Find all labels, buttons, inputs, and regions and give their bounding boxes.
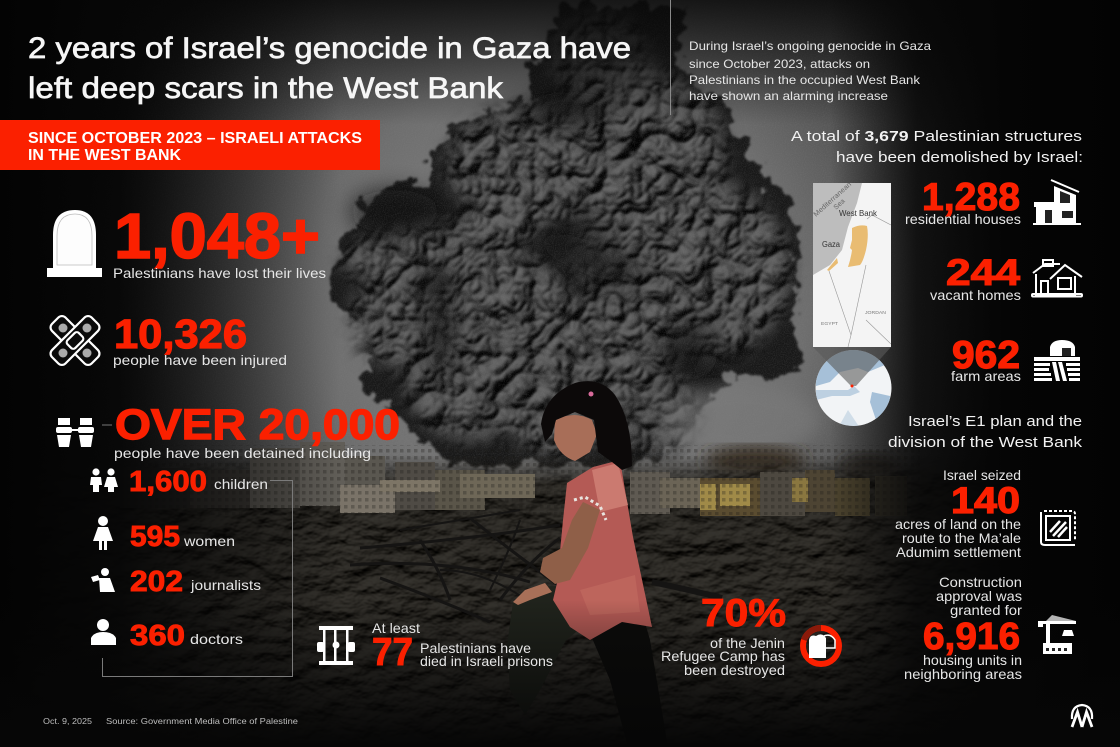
stat: killed <box>47 200 326 281</box>
near leg <box>507 586 600 715</box>
map panel: West Bank <box>839 208 878 218</box>
title: left deep scars in the West Bank <box>28 72 504 105</box>
stat: Jenin camp: of the Jenin <box>710 635 785 651</box>
photo: girl walking through rubble <box>507 381 668 747</box>
icon: land parcel <box>1041 511 1075 545</box>
red banner: SINCE OCTOBER 2023 – ISRAELI ATTACKS <box>28 130 362 147</box>
detained breakdown bracket <box>102 480 292 676</box>
E1: construction approval: granted for <box>950 602 1022 618</box>
demolished: farm areas: 962 <box>952 334 1020 377</box>
icon: journalist <box>91 568 115 592</box>
detained: journalists <box>91 566 261 598</box>
ruined city and rubble <box>0 440 1120 747</box>
E1 plan heading <box>888 413 1083 451</box>
demolished heading: have been demolished by Israel: <box>836 149 1083 166</box>
map panel: Mediterranean <box>813 181 853 218</box>
intro text: Palestinians in the occupied West Bank <box>689 73 921 87</box>
sleeve trim <box>574 497 606 520</box>
detained: women <box>93 516 235 553</box>
E1: construction approval: approval was <box>936 588 1022 604</box>
icon: outlined home <box>1032 260 1082 296</box>
intro divider <box>670 0 672 115</box>
demolished: vacant homes: vacant homes <box>930 287 1021 303</box>
stat: Jenin camp <box>661 592 839 678</box>
icon: doctor <box>91 619 116 645</box>
detained: doctors <box>91 619 243 652</box>
demolished: farm areas: farm areas <box>951 368 1021 384</box>
E1 plan heading: Israel’s E1 plan and the <box>908 413 1082 430</box>
title: 2 years of Israel’s genocide in Gaza have <box>28 32 631 65</box>
detained: doctors: doctors <box>190 631 243 647</box>
haze low right <box>660 385 820 455</box>
map panel: Gaza <box>822 240 841 249</box>
stat: injured: 10,326 <box>114 311 247 357</box>
stat: injured <box>48 311 287 368</box>
demolished: residential houses: residential houses <box>905 211 1021 227</box>
E1: construction approval: Construction <box>939 574 1022 590</box>
E1: construction approval: neighboring areas <box>904 666 1022 682</box>
detained: children <box>90 466 268 498</box>
demolished heading <box>791 128 1083 166</box>
stat: killed: 1,048+ <box>114 200 320 272</box>
icon: gravestone <box>47 210 102 277</box>
detained: journalists: journalists <box>190 577 261 593</box>
E1: land seized: acres of land on the <box>895 516 1021 532</box>
globe <box>813 347 892 428</box>
icon: prison bars <box>317 626 355 665</box>
detained: doctors: 360 <box>130 620 185 652</box>
detained: women: 595 <box>130 521 180 553</box>
demolished heading: A total of 3,679 Palestinian structures <box>791 128 1082 145</box>
E1: land seized: Israel seized <box>943 467 1021 483</box>
stat: detained: OVER 20,000 <box>115 401 400 449</box>
E1: land seized <box>895 467 1075 560</box>
bottom vignette <box>0 600 1120 747</box>
E1: land seized: route to the Ma’ale <box>902 530 1021 546</box>
face <box>554 415 597 461</box>
smoke cloud <box>320 0 820 460</box>
demolished: vacant homes <box>930 252 1082 303</box>
icon: handcuffed hands <box>56 418 94 447</box>
E1: land seized: 140 <box>951 480 1020 521</box>
intro text: since October 2023, attacks on <box>689 57 870 71</box>
stat: deaths in prison <box>317 620 553 674</box>
locator map <box>813 181 892 428</box>
map panel: Sea <box>833 198 847 211</box>
icon: barn and fields <box>1034 340 1080 381</box>
stat: killed: Palestinians have lost their lives <box>113 265 326 281</box>
stat: detained: people have been detained including <box>114 445 371 461</box>
stat: deaths in prison: Palestinians have <box>420 640 531 656</box>
dark folds in smoke <box>350 92 718 380</box>
far leg <box>583 605 668 747</box>
detained: women: women <box>183 533 235 549</box>
icon: crossed bandages <box>48 314 102 367</box>
icon: 70 percent donut <box>803 628 839 664</box>
red banner <box>0 120 380 170</box>
E1: construction approval: 6,916 <box>923 616 1020 658</box>
dress fold <box>580 575 640 615</box>
detained: children: children <box>214 476 268 492</box>
demolished: residential houses <box>905 176 1081 227</box>
E1 plan heading: division of the West Bank <box>888 434 1083 451</box>
footer source: Source: Government Media Office of Palestine <box>106 716 298 726</box>
intro text <box>689 39 931 103</box>
icon: woman <box>93 516 113 550</box>
intro text: have shown an alarming increase <box>689 89 888 103</box>
arm <box>540 502 600 584</box>
stat: Jenin camp: 70% <box>701 592 786 635</box>
stat: deaths in prison: At least <box>372 620 420 636</box>
red banner: IN THE WEST BANK <box>28 147 181 164</box>
icon: modern house <box>1033 180 1081 224</box>
map panel: EGYPT <box>821 321 838 326</box>
stat: deaths in prison: 77 <box>372 631 413 674</box>
zoom cone <box>813 347 891 386</box>
demolished: farm areas <box>951 334 1080 384</box>
stat: deaths in prison: died in Israeli prisons <box>420 653 553 669</box>
E1: construction approval <box>904 574 1076 682</box>
intro text: During Israel’s ongoing genocide in Gaza <box>689 39 931 53</box>
stat: detained <box>56 401 400 461</box>
dress highlight <box>592 463 628 512</box>
hand on knee <box>513 583 552 605</box>
stat: Jenin camp: Refugee Camp has <box>661 648 785 664</box>
map panel: JORDAN <box>865 310 886 315</box>
E1: construction approval: housing units in <box>923 652 1022 668</box>
demolished: vacant homes: 244 <box>946 252 1021 293</box>
icon: crane and building <box>1038 615 1076 654</box>
detained: children: 1,600 <box>129 466 207 498</box>
hair clips <box>588 392 594 396</box>
logo: AA <box>1072 705 1092 727</box>
stat: injured: people have been injured <box>113 352 287 368</box>
detained: journalists: 202 <box>130 566 183 598</box>
demolished: residential houses: 1,288 <box>922 176 1020 219</box>
footer date: Oct. 9, 2025 <box>43 716 92 726</box>
dress <box>553 460 652 640</box>
stat: Jenin camp: been destroyed <box>684 662 785 678</box>
icon: children <box>90 468 118 492</box>
hair <box>541 381 632 470</box>
map panel <box>813 181 891 347</box>
title <box>28 32 631 105</box>
E1: land seized: Adumim settlement <box>896 544 1021 560</box>
